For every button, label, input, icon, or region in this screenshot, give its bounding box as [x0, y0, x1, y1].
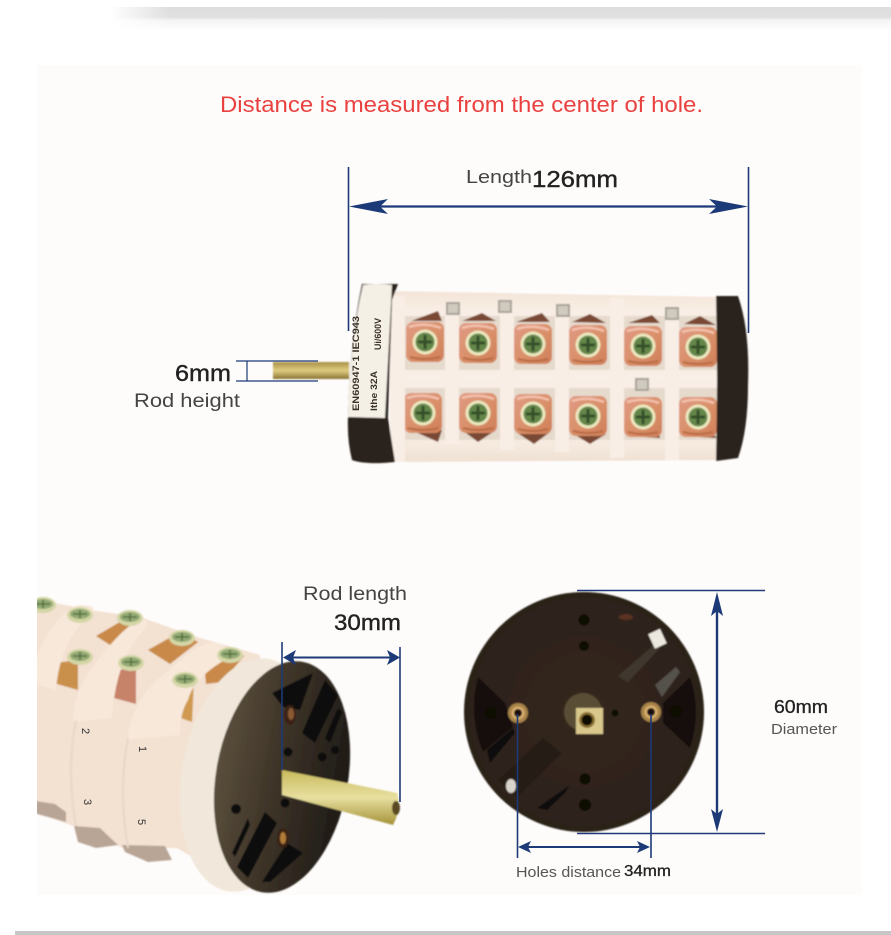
ribs	[390, 296, 679, 462]
photo: switch angled view	[30, 597, 400, 904]
left wedge	[474, 677, 513, 752]
dimension: rod height 6mm: 6mm	[175, 360, 231, 386]
dimension: diameter 60mm: 60mm	[774, 697, 828, 717]
dimension: diameter 60mm	[577, 590, 837, 834]
brass hole right	[641, 702, 661, 722]
segment numbers: 3	[81, 799, 93, 805]
dimension: rod length 30mm: Rod length	[303, 583, 407, 605]
label on end cap	[351, 316, 384, 411]
bottom terminals	[30, 800, 172, 862]
top shadow bar	[110, 7, 891, 31]
label on end cap: Ithe 32A	[369, 371, 380, 411]
white tabs	[648, 629, 667, 649]
body	[37, 603, 260, 856]
label on end cap: EN60947-1 IEC943	[351, 316, 362, 411]
upper right slot	[618, 644, 660, 682]
disc holes	[284, 705, 296, 725]
segment numbers: 2	[79, 728, 91, 734]
centre boss	[564, 693, 602, 731]
body	[392, 291, 722, 462]
brass hole left	[508, 703, 528, 723]
small holes	[485, 614, 682, 811]
terminals row two	[404, 393, 717, 437]
brown triangles	[411, 311, 716, 444]
shaft	[273, 362, 349, 379]
dimension: length 126mm: 126mm	[532, 166, 618, 192]
segment numbers: 1	[136, 746, 148, 752]
middle band	[405, 374, 717, 382]
bottom shadow bar	[15, 931, 891, 935]
screws	[30, 597, 243, 688]
heading: measurement note: Distance is measured from the center of hole.	[220, 92, 703, 117]
dimension: holes distance 34mm: Holes distance	[516, 865, 621, 881]
disc	[213, 660, 352, 894]
disc	[464, 592, 704, 832]
dimension: rod length 30mm: 30mm	[334, 610, 401, 635]
rim	[181, 658, 281, 892]
dimension: rod height 6mm: Rod height	[134, 390, 241, 412]
terminals row one	[406, 322, 717, 367]
dimension: rod length 30mm	[282, 583, 407, 802]
dimension: holes distance 34mm: 34mm	[624, 863, 671, 880]
dimension: length 126mm	[348, 166, 748, 333]
lower left recess	[498, 738, 562, 797]
right wedge	[663, 677, 696, 748]
lower slot	[537, 785, 570, 810]
ribs	[46, 604, 223, 738]
copper terminals	[48, 616, 244, 722]
rib edges	[71, 720, 128, 848]
dimension: rod height 6mm	[134, 360, 318, 412]
left end cap	[348, 284, 398, 463]
right end cap	[716, 296, 748, 461]
dimension: length 126mm: Length	[466, 166, 532, 187]
disc cutouts	[231, 673, 342, 882]
shaft	[282, 770, 399, 825]
label on end cap: Ui/600V	[373, 317, 384, 350]
terminal windows	[405, 316, 717, 370]
segment numbers: 5	[135, 819, 147, 825]
clips	[446, 300, 679, 391]
photo: switch end view	[464, 592, 704, 832]
dimension: diameter 60mm: Diameter	[771, 722, 837, 738]
segment numbers	[79, 728, 148, 825]
photo: switch side view	[273, 284, 748, 463]
dimension: holes distance 34mm	[516, 714, 671, 881]
